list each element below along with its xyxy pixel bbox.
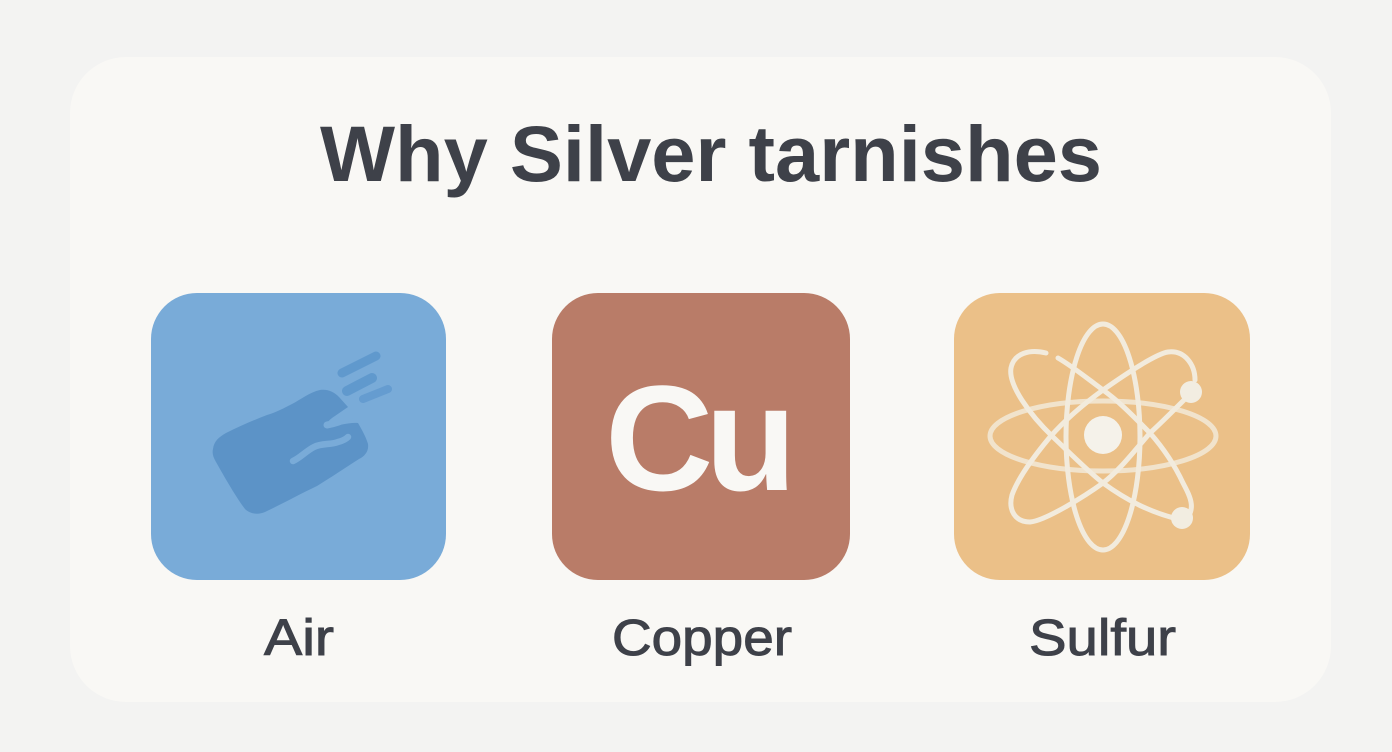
electron upper [1180, 381, 1202, 403]
atom nucleus [1084, 416, 1122, 454]
icon: Cu symbol: Cu [605, 354, 797, 522]
label: Copper: Copper [612, 609, 792, 666]
icon: air tarnish patch [213, 356, 388, 514]
panel: copper [552, 293, 850, 580]
air tile [151, 293, 446, 580]
sulfur tile [954, 293, 1250, 580]
panel: main card [70, 57, 1331, 702]
label: Sulfur: Sulfur [1029, 609, 1176, 666]
panel: sulfur [954, 293, 1250, 580]
label: Air: Air [264, 609, 334, 666]
icon: atom [990, 324, 1216, 550]
title: Why Silver tarnishes [320, 109, 1102, 198]
panel: air [151, 293, 446, 580]
copper tile [552, 293, 850, 580]
electron lower [1171, 507, 1193, 529]
